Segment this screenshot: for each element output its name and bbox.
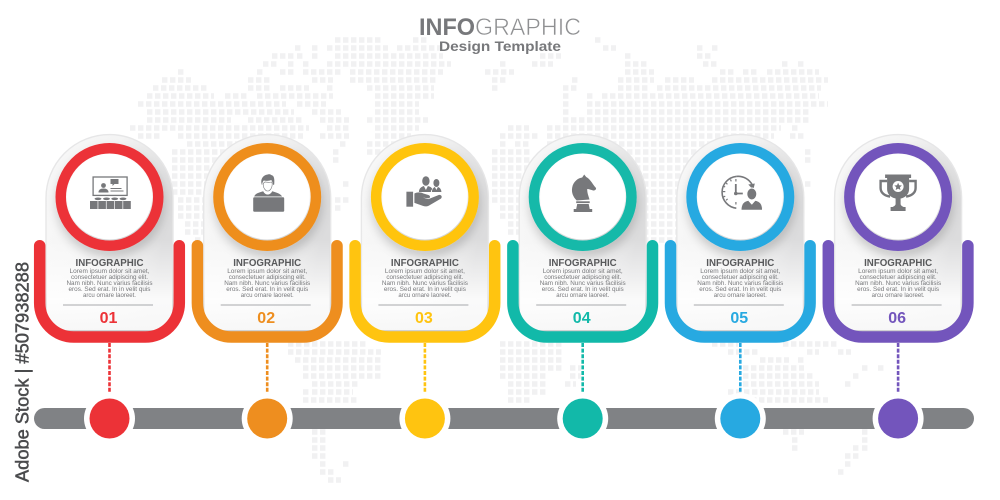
icon: chess knight — [572, 174, 596, 212]
side credit text: Adobe Stock | #507938288 — [12, 262, 32, 482]
number: 01: 01 — [100, 310, 118, 327]
timeline node: 03 — [399, 393, 450, 444]
ring: step 03 — [376, 148, 473, 246]
number: 03: 03 — [415, 310, 433, 327]
text: step 03: Lorem ipsum dolor sit amet, — [385, 268, 465, 275]
text: step 06 — [855, 258, 941, 299]
title: Design Template — [439, 38, 561, 54]
text: step 04: INFOGRAPHIC — [549, 258, 617, 269]
panel: step 01 — [40, 135, 179, 444]
text: step 04: Lorem ipsum dolor sit amet, — [543, 268, 623, 275]
title: INFO — [419, 14, 475, 41]
text: step 05: Nam nibh. Nunc varius facilisis — [697, 280, 783, 287]
panel: step 03 — [355, 135, 495, 444]
text: step 05: Lorem ipsum dolor sit amet, — [700, 268, 781, 275]
title: GRAPHIC — [475, 14, 581, 41]
timeline node: 02 — [242, 393, 293, 444]
text: step 06: Lorem ipsum dolor sit amet, — [858, 268, 938, 275]
timeline node: 04 — [557, 393, 608, 444]
timeline node: 01 — [84, 393, 135, 444]
text: step 02: Nam nibh. Nunc varius facilisis — [224, 280, 310, 287]
text: step 01: INFOGRAPHIC — [76, 258, 144, 269]
ring: step 02 — [219, 148, 316, 246]
text: step 02: consectetuer adipiscing elit. — [229, 274, 306, 281]
panel: step 05 — [670, 135, 810, 444]
text: step 06: consectetuer adipiscing elit. — [860, 274, 937, 281]
icon: hand holding people — [406, 176, 442, 207]
ring: step 05 — [692, 148, 789, 246]
text: step 05: eros. Sed erat. In in velit quis — [699, 286, 781, 293]
text: step 05: arcu ornare laoreet. — [714, 292, 767, 299]
text: step 03: INFOGRAPHIC — [391, 258, 459, 269]
timeline node: 06 — [873, 393, 924, 444]
text: step 02 — [224, 258, 310, 299]
text: step 01: Nam nibh. Nunc varius facilisis — [66, 280, 152, 287]
text: step 01 — [66, 258, 152, 299]
icon: trophy — [881, 174, 916, 211]
icon: person at laptop — [253, 174, 284, 212]
timeline node: 05 — [715, 393, 766, 444]
text: step 03: arcu ornare laoreet. — [398, 292, 452, 299]
text: step 01: Lorem ipsum dolor sit amet, — [70, 268, 150, 275]
text: step 06: eros. Sed erat. In in velit quis — [857, 286, 939, 293]
timeline bar — [34, 408, 974, 429]
text: step 01: consectetuer adipiscing elit. — [71, 274, 148, 281]
ring: step 06 — [850, 148, 947, 246]
text: step 03: consectetuer adipiscing elit. — [386, 274, 464, 281]
text: step 05: INFOGRAPHIC — [706, 258, 774, 269]
text: step 03: Nam nibh. Nunc varius facilisis — [382, 280, 468, 287]
text: step 05: consectetuer adipiscing elit. — [702, 274, 779, 281]
text: step 01: eros. Sed erat. In in velit quis — [68, 286, 150, 293]
text: step 04: arcu ornare laoreet. — [556, 292, 609, 299]
text: step 04: eros. Sed erat. In in velit quis — [542, 286, 624, 293]
text: step 01: arcu ornare laoreet. — [83, 292, 136, 299]
ring: step 04 — [534, 148, 631, 246]
text: step 06: INFOGRAPHIC — [864, 258, 932, 269]
text: step 03: eros. Sed erat. In in velit quis — [384, 286, 466, 293]
text: step 04 — [540, 258, 626, 299]
panel: step 06 — [828, 135, 968, 444]
icon: presentation audience — [90, 177, 131, 209]
text: step 05 — [697, 258, 783, 299]
title — [419, 14, 581, 54]
text: step 03 — [382, 258, 468, 299]
text: step 04: Nam nibh. Nunc varius facilisis — [540, 280, 626, 287]
text: step 02: eros. Sed erat. In in velit quis — [226, 286, 308, 293]
number: 05: 05 — [730, 310, 748, 327]
text: step 02: INFOGRAPHIC — [233, 258, 301, 269]
text: step 06: arcu ornare laoreet. — [872, 292, 925, 299]
ring: step 01 — [61, 148, 158, 246]
text: step 02: arcu ornare laoreet. — [241, 292, 294, 299]
dotted world map background — [130, 40, 884, 480]
text: step 06: Nam nibh. Nunc varius facilisis — [855, 280, 941, 287]
panel: step 04 — [513, 135, 652, 444]
number: 02: 02 — [257, 310, 275, 327]
text: step 04: consectetuer adipiscing elit. — [544, 274, 621, 281]
panel: step 02 — [197, 135, 337, 444]
number: 06: 06 — [888, 310, 906, 327]
number: 04: 04 — [573, 310, 591, 327]
icon: clock and businessperson — [722, 176, 762, 210]
text: step 02: Lorem ipsum dolor sit amet, — [227, 268, 307, 275]
